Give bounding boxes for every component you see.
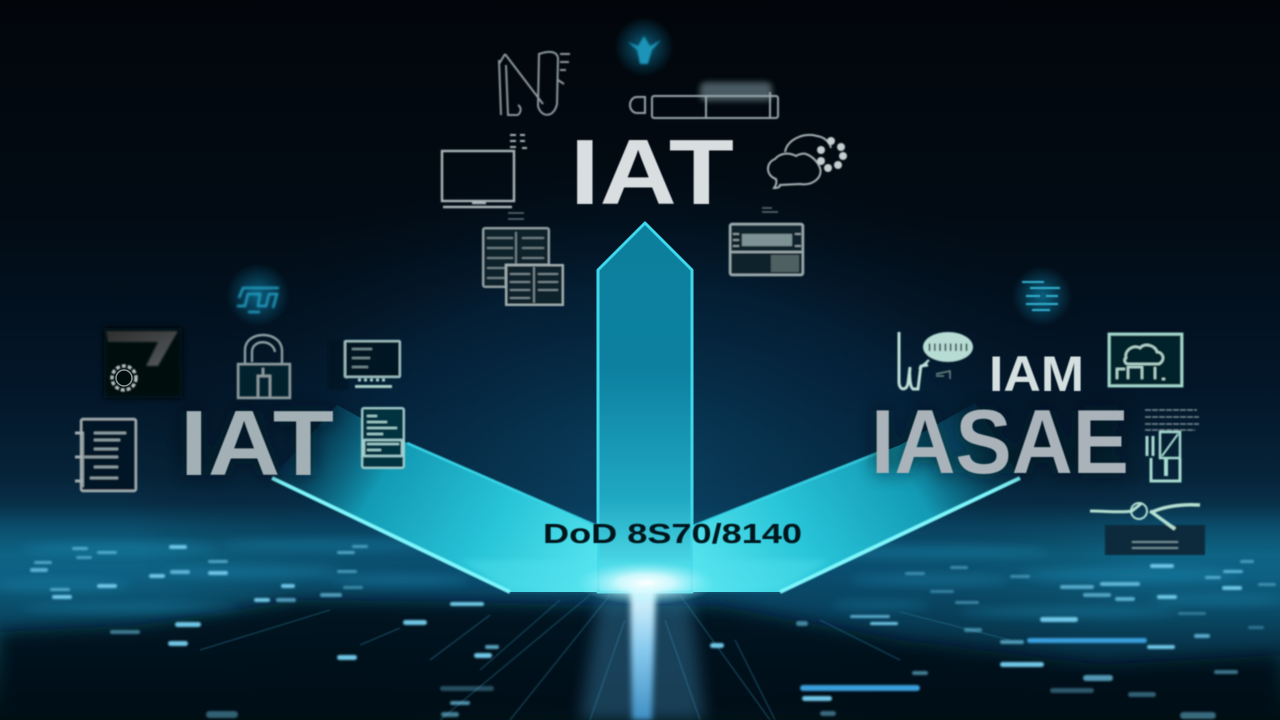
light beam and flare at arrow origin bbox=[576, 561, 716, 720]
icon: computer monitor bbox=[442, 135, 527, 219]
icon: USB stick bbox=[630, 82, 778, 118]
icon: figure with speech bubble: IIIIIIII bbox=[928, 342, 968, 354]
icon: stacked documents bbox=[483, 228, 563, 305]
label DoD 8570/8140: DoD 8S70/8140 bbox=[543, 518, 802, 549]
icon: hardware device panel bbox=[730, 208, 803, 275]
icon: glowing symbol above left group bbox=[226, 263, 290, 327]
icon: checklist document bbox=[75, 419, 136, 491]
icon: terminal monitor with keyboard bbox=[328, 340, 400, 390]
icon: network diagram board bbox=[1109, 334, 1182, 386]
right heading IASAE: IASAE bbox=[871, 392, 1129, 493]
icon: form document right of left IAT bbox=[362, 408, 404, 468]
digital floor: glowing light dashes and perspective lines bbox=[0, 539, 1280, 720]
centre heading IAT: IAT bbox=[570, 120, 734, 224]
centre arrow pointing up bbox=[598, 223, 692, 592]
right sub-heading IAM: IAM bbox=[989, 346, 1084, 402]
right heading IASAE: IASAE bbox=[871, 392, 1129, 493]
icon: gear with dark panel bbox=[104, 328, 182, 398]
convergence base band bbox=[460, 560, 830, 592]
right diagonal arrow bbox=[693, 403, 1020, 592]
icon: figure with speech bubble bbox=[899, 332, 973, 389]
left heading IAT: IAT bbox=[180, 391, 334, 495]
left heading IAT: IAT bbox=[180, 391, 334, 495]
icon: glowing top symbol bbox=[614, 17, 674, 77]
left diagonal arrow bbox=[272, 405, 597, 592]
icon: numbered data block with text lines bbox=[1145, 410, 1199, 481]
icon: tool outline top left bbox=[499, 52, 570, 115]
icon: padlock bbox=[238, 335, 290, 398]
icon: glowing symbol above right group bbox=[1012, 266, 1072, 326]
icon: speech clouds with gear bbox=[768, 135, 847, 188]
icon: winged emblem with dark panel bbox=[1090, 503, 1205, 555]
